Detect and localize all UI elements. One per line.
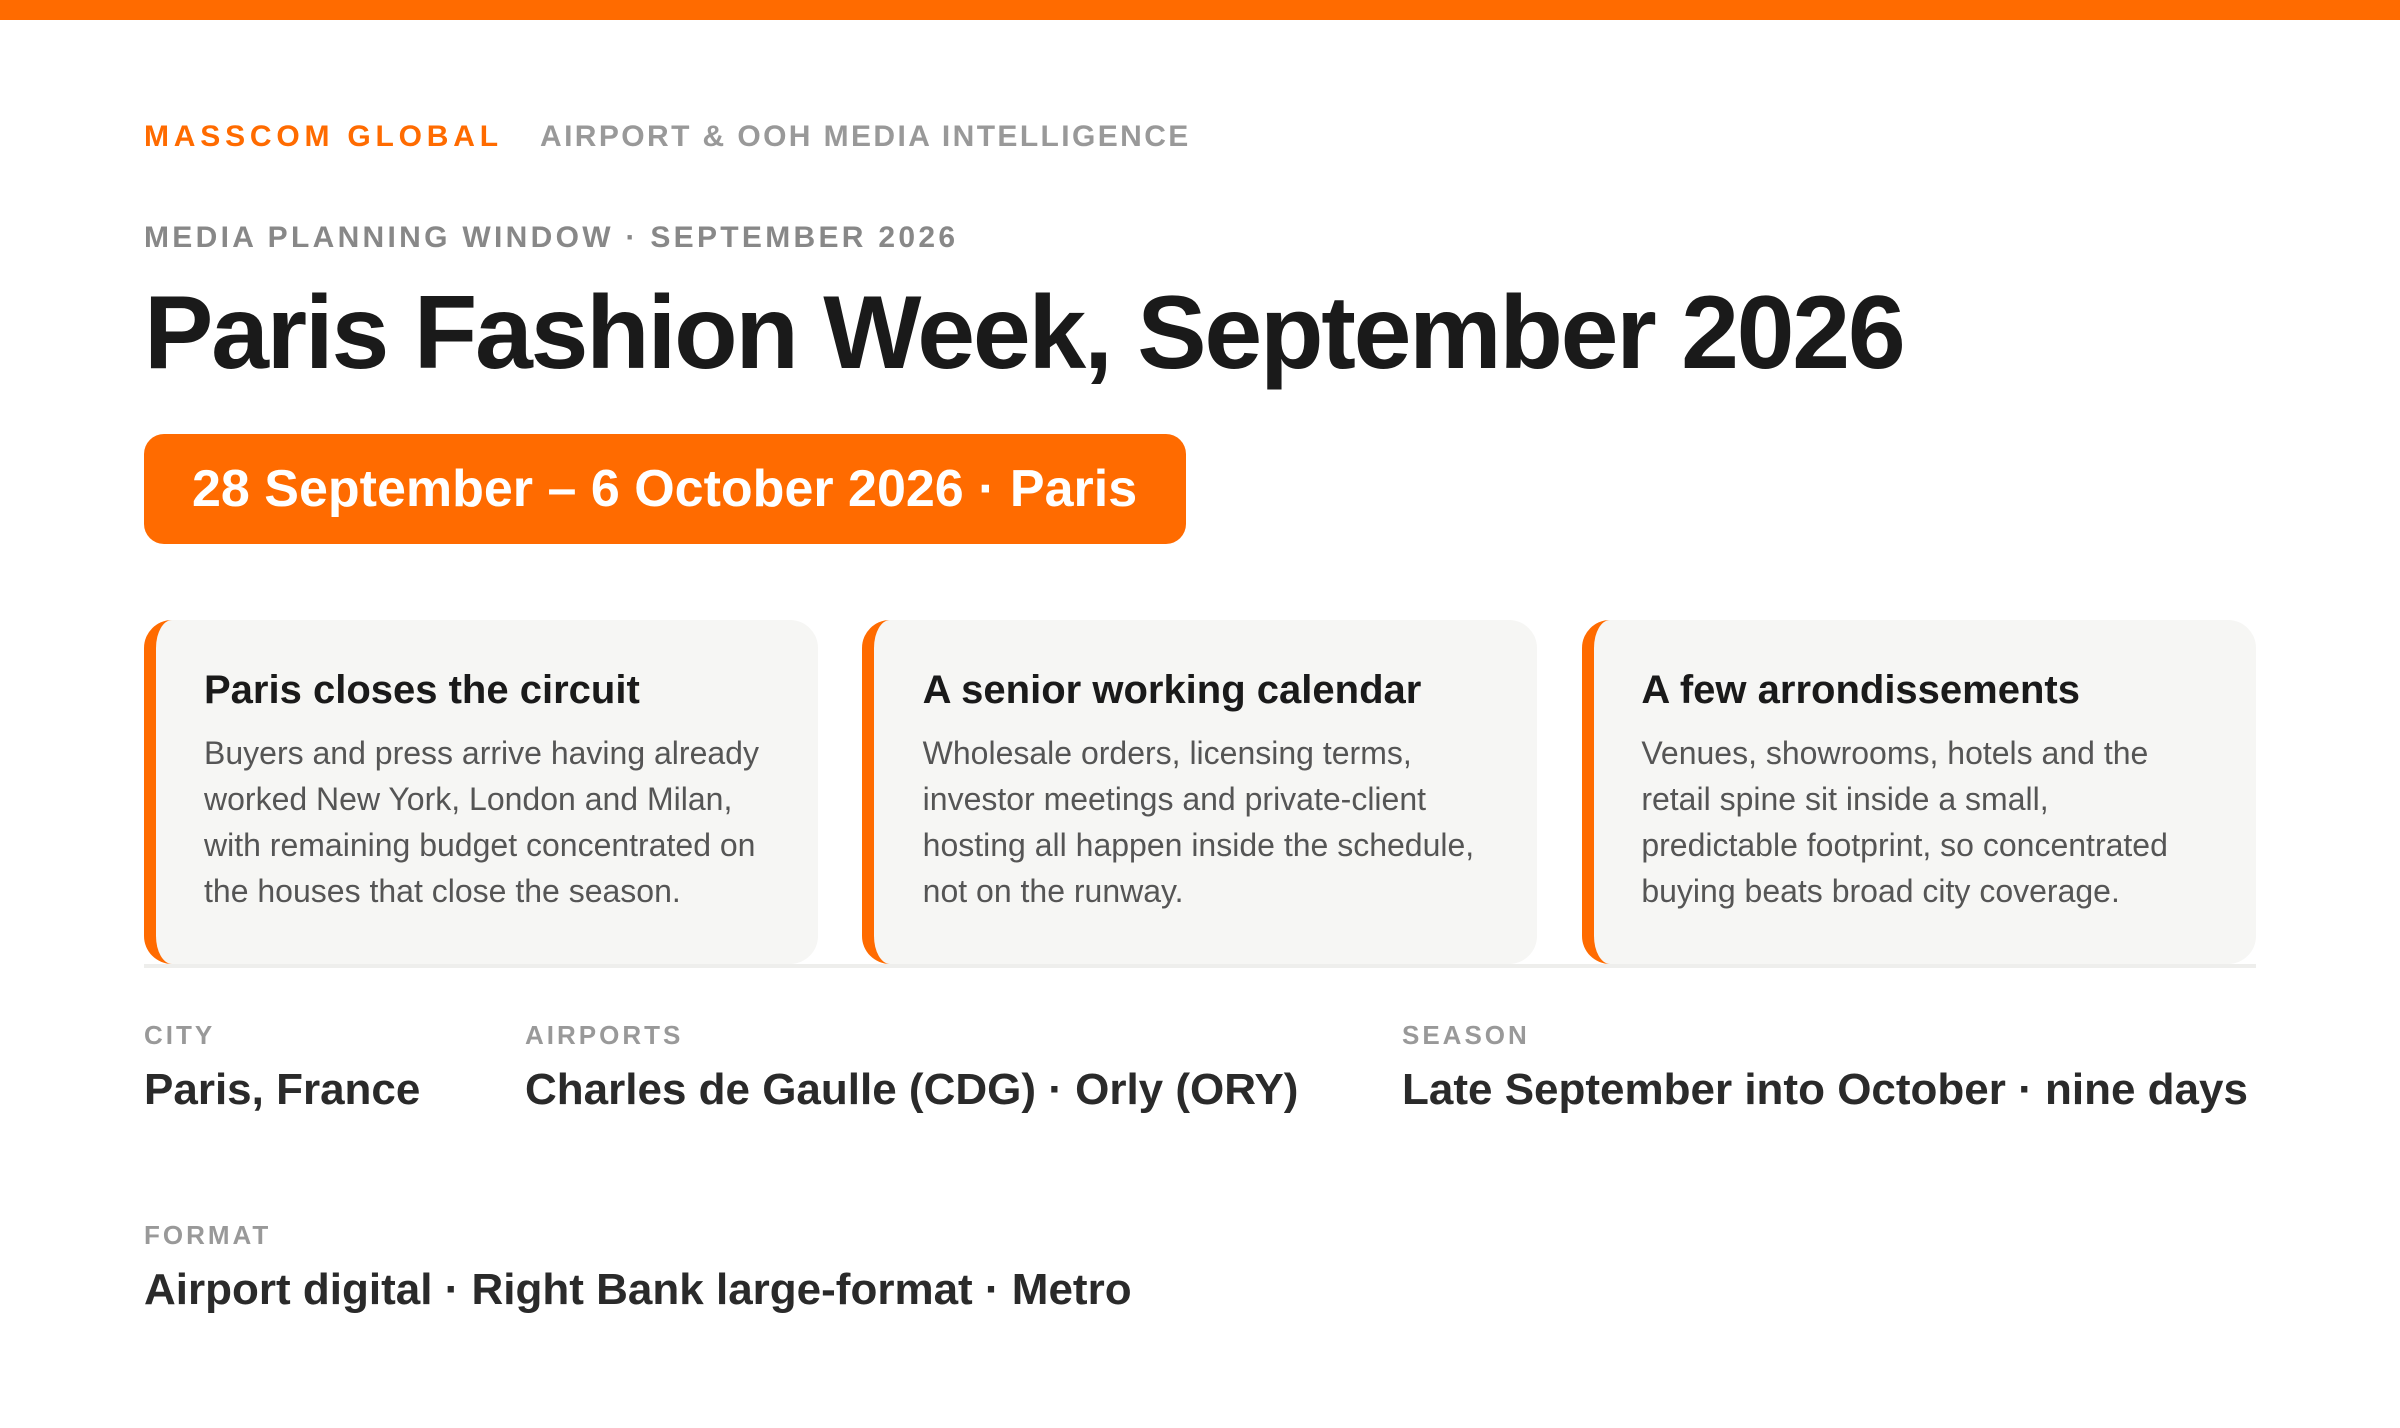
card heading: A few arrondissements <box>1641 668 2080 712</box>
fact: airports <box>525 1020 1298 1114</box>
city value: Paris, France <box>144 1065 420 1114</box>
card body: hosting all happen inside the schedule, <box>923 827 1474 863</box>
card body: Wholesale orders, licensing terms, <box>923 735 1412 771</box>
card body: buying beats broad city coverage. <box>1641 873 2120 909</box>
top accent bar <box>0 0 2400 20</box>
panel: A few arrondissements <box>1582 620 2256 964</box>
card body: predictable footprint, so concentrated <box>1641 827 2168 863</box>
card body: not on the runway. <box>923 873 1184 909</box>
card body <box>1641 735 2168 909</box>
title: Paris Fashion Week, September 2026 <box>144 275 1903 391</box>
card body: worked New York, London and Milan, <box>204 781 732 817</box>
brand name: MASSCOM GLOBAL <box>144 120 503 153</box>
divider <box>144 964 2256 968</box>
card body: the houses that close the season. <box>204 873 681 909</box>
card body: with remaining budget concentrated on <box>204 827 755 863</box>
airports label: AIRPORTS <box>525 1020 683 1050</box>
card heading: A senior working calendar <box>923 668 1421 712</box>
date pill <box>144 434 1186 544</box>
airports value: Charles de Gaulle (CDG) · Orly (ORY) <box>525 1065 1298 1114</box>
card body: Venues, showrooms, hotels and the <box>1641 735 2148 771</box>
panel: Paris closes the circuit <box>144 620 818 964</box>
brand descriptor: AIRPORT & OOH MEDIA INTELLIGENCE <box>540 120 1191 153</box>
fact: format <box>144 1220 1132 1314</box>
format value: Airport digital · Right Bank large-format · Metro <box>144 1265 1132 1314</box>
eyebrow: MEDIA PLANNING WINDOW · SEPTEMBER 2026 <box>144 221 958 254</box>
card body: retail spine sit inside a small, <box>1641 781 2049 817</box>
date pill: 28 September – 6 October 2026 · Paris <box>192 460 1137 518</box>
city label: CITY <box>144 1020 215 1050</box>
card body <box>204 735 759 909</box>
fact: city <box>144 1020 420 1114</box>
card body: investor meetings and private-client <box>923 781 1426 817</box>
brand line <box>144 120 1191 153</box>
format label: FORMAT <box>144 1220 271 1250</box>
fact: season <box>1402 1020 2248 1114</box>
season label: SEASON <box>1402 1020 1530 1050</box>
season value: Late September into October · nine days <box>1402 1065 2248 1114</box>
card heading: Paris closes the circuit <box>204 668 640 712</box>
card body <box>922 735 1474 909</box>
panel: A senior working calendar <box>862 620 1537 964</box>
card body: Buyers and press arrive having already <box>204 735 759 771</box>
